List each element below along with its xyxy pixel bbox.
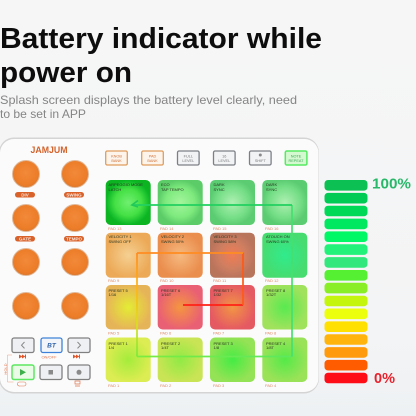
pad text: LATCH — [108, 187, 121, 192]
transport buttons: ON/OFF — [41, 354, 57, 360]
pad text: ATOUCH ON — [266, 234, 290, 239]
battery label: 100%: 100% — [372, 176, 411, 192]
pad text: SYNC — [266, 187, 277, 192]
function buttons: REPEAT — [289, 159, 304, 163]
pad text: 1/4T — [161, 345, 170, 350]
pad number labels: PAD 15 — [213, 226, 227, 231]
pad text: DARK — [214, 182, 225, 187]
pad number labels: PAD 1 — [108, 383, 120, 388]
function buttons: 16 — [222, 154, 226, 158]
transport buttons — [3, 338, 90, 386]
function buttons: BANK — [147, 159, 158, 163]
title — [0, 23, 322, 89]
pad number labels: PAD 5 — [108, 330, 120, 336]
pad number labels — [108, 226, 279, 388]
subtitle — [0, 93, 297, 121]
function buttons — [106, 151, 307, 165]
pad text: PRESET 7 — [214, 288, 234, 293]
function buttons: SHIFT — [255, 159, 266, 163]
subtitle: Splash screen displays the battery level clearly, need — [0, 93, 297, 107]
pad text: PRESET 8 — [266, 288, 286, 293]
pad text: 1/4 — [108, 345, 115, 350]
knobs — [12, 160, 88, 320]
battery label: 0%: 0% — [374, 371, 395, 387]
pad text: PRESET 1 — [108, 341, 129, 346]
pad number labels: PAD 13 — [108, 226, 122, 231]
function buttons: LEVEL — [182, 159, 194, 163]
pad text: TAP TEMPO — [161, 187, 184, 192]
transport buttons: HOLD — [3, 363, 8, 375]
pad number labels: PAD 4 — [265, 383, 277, 388]
pad number labels: PAD 10 — [160, 278, 174, 283]
pad number labels: PAD 16 — [265, 226, 279, 231]
pad text: PRESET 2 — [161, 341, 181, 346]
knob labels — [15, 192, 84, 242]
knob labels: GATE — [19, 237, 31, 242]
pad text: PRESET 4 — [266, 341, 286, 346]
pad text: SWING 50% — [161, 239, 184, 244]
pad text: ARPEGGIO MODE — [108, 182, 143, 187]
pad number labels: PAD 11 — [213, 278, 227, 283]
title: power on — [0, 57, 132, 89]
pad text: 1/16T — [161, 292, 172, 297]
pad text: 1/32 — [214, 292, 222, 297]
knob labels: TEMPO — [66, 237, 82, 242]
pad text: VELOCITY 2 — [161, 234, 185, 239]
pad text: PRESET 3 — [214, 341, 234, 346]
pad number labels: PAD 6 — [160, 330, 172, 336]
brand logo: JAMJUM — [30, 145, 68, 156]
pad grid — [106, 180, 307, 382]
function buttons: KNOB — [111, 154, 122, 158]
pad text: VELOCITY 1 — [108, 234, 132, 239]
pad number labels: PAD 2 — [160, 383, 172, 388]
pad text: PRESET 6 — [161, 288, 181, 293]
battery level bar — [324, 180, 368, 383]
function buttons: BANK — [111, 159, 122, 163]
pad text: VELOCITY 3 — [214, 234, 237, 239]
pad number labels: PAD 7 — [213, 330, 225, 336]
function buttons: NOTE — [291, 154, 302, 158]
function buttons: PAD — [149, 154, 157, 158]
snake path arrow — [132, 200, 292, 356]
pad text: SYNC — [214, 187, 225, 192]
pad number labels: PAD 3 — [213, 383, 225, 388]
pad text: 1/8 — [214, 345, 220, 350]
subtitle: to be set in APP — [0, 107, 86, 121]
pad number labels: PAD 8 — [265, 330, 277, 336]
pad text: PRESET 5 — [108, 288, 129, 293]
function buttons: FULL — [184, 154, 193, 158]
pad number labels: PAD 9 — [108, 278, 120, 283]
pad number labels: PAD 14 — [160, 226, 174, 231]
pad text: DARK — [266, 182, 277, 187]
pad text: ECO — [161, 182, 170, 187]
knob labels: DIV — [21, 193, 29, 198]
knob labels: SWING — [66, 193, 82, 198]
pad text: 1/8T — [266, 345, 275, 350]
function buttons: LEVEL — [218, 159, 230, 163]
transport buttons: BT — [47, 342, 57, 350]
pad text: SWING 58% — [214, 239, 237, 244]
pad text: 1/32T — [266, 292, 277, 297]
pad text: 1/16 — [108, 292, 117, 297]
pad text: SWING 60% — [266, 239, 289, 244]
panel: controller device — [0, 138, 319, 394]
pad number labels: PAD 12 — [265, 278, 279, 283]
pad text — [108, 182, 290, 350]
pad text: SWING OFF — [108, 239, 132, 244]
title: Battery indicator while — [0, 23, 322, 55]
